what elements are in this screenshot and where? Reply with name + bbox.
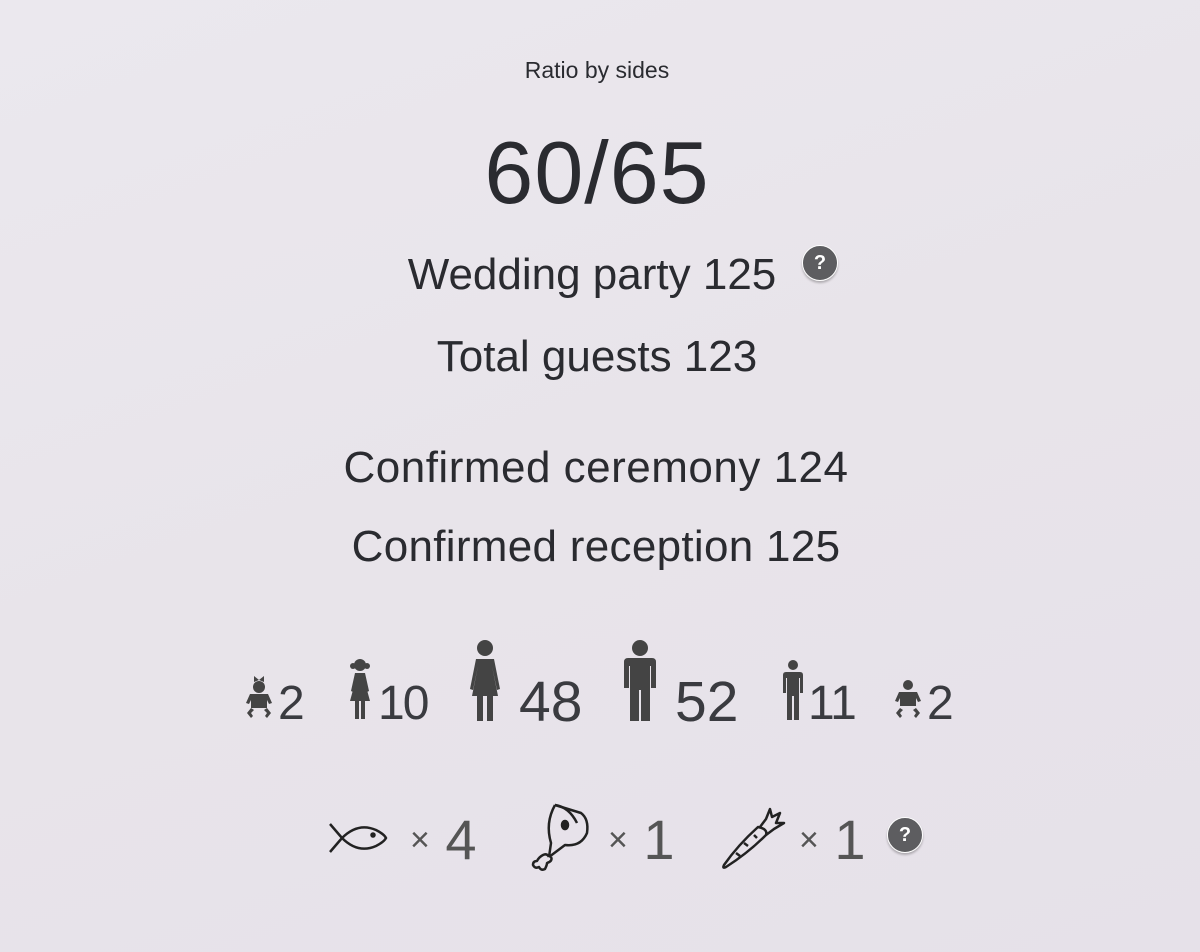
help icon: meals: ? — [899, 824, 911, 846]
title: Ratio by sides — [525, 57, 669, 83]
count: fish: × 4 — [410, 808, 477, 871]
help icon: wedding party — [802, 245, 838, 281]
icon: woman — [470, 640, 500, 721]
help icon: meals — [887, 817, 923, 853]
wedding party stat: Wedding party 125 — [408, 250, 776, 299]
icon: man — [624, 640, 656, 721]
count: boys: 11 — [808, 677, 856, 730]
confirmed reception stat: Confirmed reception 125 — [352, 522, 840, 571]
icon: boy — [783, 660, 803, 720]
icon: girl — [350, 659, 370, 719]
count: meat: × 1 — [608, 808, 675, 871]
count: girls: 10 — [378, 677, 427, 730]
icon: baby girl — [246, 676, 272, 718]
total guests stat: Total guests 123 — [437, 332, 757, 381]
count: baby boys: 2 — [927, 677, 954, 730]
icon: baby boy — [895, 680, 921, 718]
count: baby girls: 2 — [278, 677, 305, 730]
meal row — [329, 804, 924, 871]
icon: carrot — [722, 808, 786, 869]
people row — [246, 640, 954, 734]
help icon: wedding party: ? — [814, 252, 826, 274]
count: carrot: × 1 — [799, 808, 866, 871]
count: men: 52 — [675, 670, 738, 734]
ratio value: 60/65 — [484, 123, 710, 222]
icon: meat — [532, 804, 589, 871]
icon: fish — [329, 823, 388, 853]
confirmed ceremony stat: Confirmed ceremony 124 — [343, 443, 848, 492]
count: women: 48 — [519, 670, 582, 734]
